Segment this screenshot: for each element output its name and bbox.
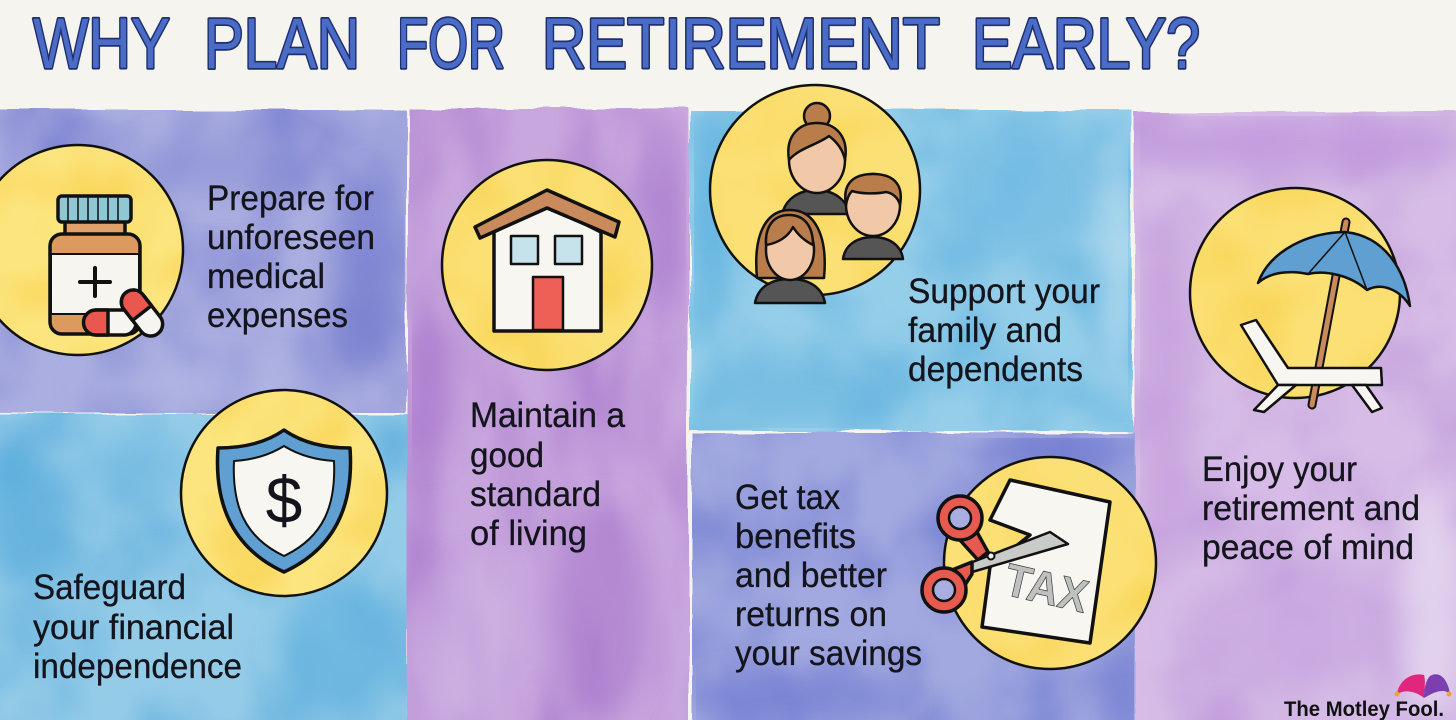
label: financial independence: independence <box>33 647 242 686</box>
label: tax benefits: benefits <box>735 517 856 556</box>
label: family and dependents: dependents <box>908 350 1083 389</box>
watercolor wash: periwinkle <box>692 433 1135 720</box>
label: financial independence: Safeguard <box>33 568 186 607</box>
label: standard of living: Maintain a <box>470 396 626 435</box>
icon: family of three <box>755 103 903 303</box>
circle: yellow backing <box>0 145 183 355</box>
label: standard of living: standard <box>470 475 601 514</box>
label: family and dependents: Support your <box>908 272 1100 311</box>
title: EARLY? <box>972 5 1200 84</box>
watercolor wash: purple <box>408 108 689 720</box>
title: RETIREMENT <box>542 5 940 84</box>
panel: family and dependents <box>690 85 1132 431</box>
watercolor wash: sky blue <box>0 414 408 720</box>
panel: tax benefits <box>690 426 1156 720</box>
label: medical expenses: Prepare for <box>207 179 374 218</box>
title <box>33 5 1200 84</box>
circle: yellow backing <box>1190 188 1400 398</box>
wash variation: darker strips <box>406 120 684 720</box>
label: tax benefits: and better <box>735 556 887 595</box>
icon: beach umbrella and lounge chair <box>1241 222 1410 412</box>
label: peace of mind: Enjoy your <box>1202 450 1357 489</box>
title: PLAN <box>204 5 360 84</box>
label: tax benefits <box>735 478 922 673</box>
wash variation: darker patches <box>80 135 399 405</box>
label: medical expenses <box>207 179 375 335</box>
wash variation: darker patches <box>690 120 1130 426</box>
logo: The Motley Fool <box>1284 674 1452 720</box>
label: standard of living: good <box>470 436 544 475</box>
circle: yellow backing <box>944 457 1156 669</box>
icon: shield with dollar <box>217 430 351 572</box>
label: standard of living: of living <box>470 514 587 553</box>
icon: tax document and scissors <box>922 480 1110 643</box>
label: standard of living <box>470 396 626 553</box>
label: peace of mind <box>1202 450 1420 567</box>
label: family and dependents: family and <box>908 311 1062 350</box>
label: tax benefits: returns on <box>735 595 887 634</box>
panel: medical expenses <box>0 110 406 413</box>
label: tax benefits: your savings <box>735 634 922 673</box>
icon: tax document and scissors: TAX <box>1000 553 1094 623</box>
label: peace of mind: retirement and <box>1202 489 1420 528</box>
title: FOR <box>397 5 505 84</box>
title: WHY <box>33 5 170 84</box>
label: family and dependents <box>908 272 1100 389</box>
wash variation: darker patches <box>0 435 400 720</box>
watercolor wash: light blue <box>690 110 1132 431</box>
circle: yellow backing <box>442 160 652 370</box>
label: tax benefits: Get tax <box>735 478 840 517</box>
wash variation: darker patches <box>690 426 1155 720</box>
wash: light purple behind the peace-of-mind panel <box>1130 112 1456 720</box>
icon: medicine bottle and pills <box>50 196 167 341</box>
label: financial independence: your financial <box>33 608 234 647</box>
watercolor wash: periwinkle <box>0 110 406 413</box>
icon: shield with dollar: $ <box>266 463 302 537</box>
man <box>843 174 903 259</box>
panel: financial independence <box>0 390 408 720</box>
girl with long hair <box>755 210 825 303</box>
label: medical expenses: medical <box>207 257 325 296</box>
icon: house <box>475 190 619 331</box>
panel: standard of living <box>406 108 689 720</box>
label: financial independence <box>33 568 242 686</box>
panel: peace of mind <box>1190 188 1452 720</box>
circle: yellow backing <box>710 85 920 295</box>
label: peace of mind: peace of mind <box>1202 528 1414 567</box>
label: medical expenses: expenses <box>207 296 348 335</box>
woman with bun <box>782 103 850 214</box>
label: medical expenses: unforeseen <box>207 218 375 257</box>
circle: yellow backing <box>181 390 387 596</box>
icon: jester hat <box>1394 674 1452 698</box>
